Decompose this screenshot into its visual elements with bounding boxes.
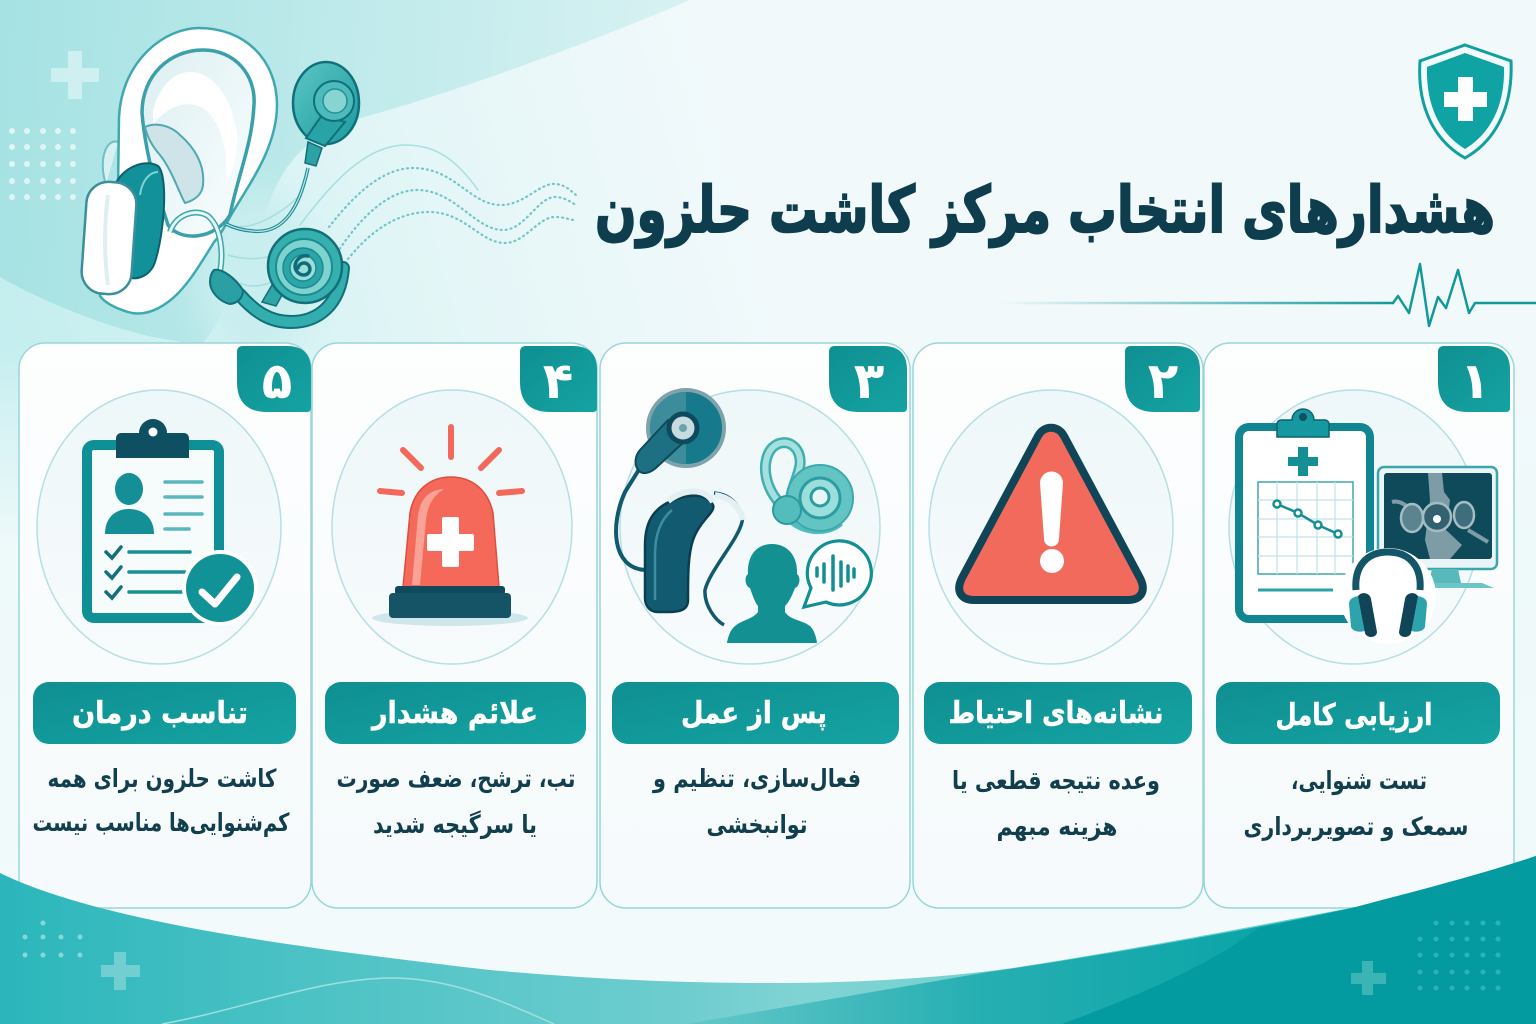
icon: behind-ear processor bbox=[645, 491, 743, 625]
decorative dots bottom left bbox=[22, 920, 82, 958]
ear inner bowl bbox=[142, 50, 254, 236]
antihelix highlight bbox=[153, 72, 237, 187]
decorative dots bottom right bbox=[1418, 920, 1500, 990]
decorative plus bottom left bbox=[101, 952, 140, 990]
icon: shield bbox=[1420, 45, 1511, 158]
ear hook bbox=[170, 213, 222, 272]
illustration: ear with cochlear implant bbox=[80, 28, 359, 322]
description: توانبخشی bbox=[706, 810, 808, 840]
sound waves bbox=[300, 145, 576, 267]
processor white bbox=[80, 180, 138, 296]
description: هزینه مبهم bbox=[996, 812, 1118, 842]
icon: clipboard with audiogram bbox=[1239, 409, 1370, 619]
faint lobe lines bbox=[228, 195, 300, 286]
badge 5 bbox=[237, 346, 311, 412]
heading pill: تناسب درمان bbox=[72, 696, 248, 731]
ear concha bbox=[145, 125, 203, 203]
description bbox=[651, 764, 861, 840]
heading pill: پس از عمل bbox=[681, 696, 827, 731]
description: وعده نتیجه قطعی یا bbox=[952, 766, 1160, 796]
icon: clipboard with check bbox=[87, 419, 258, 626]
description bbox=[336, 764, 576, 840]
badge 3 bbox=[829, 346, 907, 412]
description: تب، ترشح، ضعف صورت bbox=[336, 764, 576, 794]
heading pill bbox=[1216, 682, 1500, 744]
panel 2: caution signs bbox=[913, 343, 1203, 908]
badge 1 bbox=[1438, 346, 1510, 412]
heartbeat line bbox=[1000, 264, 1536, 326]
icon: speech bubble bbox=[804, 541, 871, 607]
lead bbox=[240, 268, 343, 322]
heading pill bbox=[325, 682, 586, 744]
badge 1: ۱ bbox=[1460, 352, 1490, 410]
description: فعال‌سازی، تنظیم و bbox=[651, 764, 861, 794]
icon: siren bbox=[372, 427, 528, 626]
badge 4: ۴ bbox=[543, 352, 573, 410]
heading pill bbox=[612, 682, 899, 744]
coil disc bbox=[293, 62, 359, 144]
heading pill bbox=[33, 682, 296, 744]
bottom wave bbox=[0, 856, 1536, 1024]
icon: CT monitor bbox=[1378, 467, 1497, 588]
badge 2 bbox=[1125, 346, 1200, 412]
panel 1: full assessment bbox=[1204, 343, 1514, 908]
icon: warning triangle bbox=[959, 428, 1143, 600]
icon: headphones bbox=[1340, 548, 1436, 644]
description bbox=[1244, 766, 1468, 842]
icon: external coil bbox=[616, 390, 724, 570]
badge 5: ۵ bbox=[262, 352, 292, 410]
decorative dots top left bbox=[9, 128, 76, 200]
description: تست شنوایی، bbox=[1291, 766, 1427, 796]
description: کاشت حلزون برای همه bbox=[48, 764, 277, 794]
decorative plus bottom right bbox=[1351, 961, 1386, 995]
badge 3: ۳ bbox=[854, 352, 884, 410]
icon: person bbox=[727, 544, 817, 643]
badge 2: ۲ bbox=[1148, 352, 1178, 410]
ear bbox=[100, 28, 277, 314]
description: یا سرگیجه شدید bbox=[373, 810, 537, 840]
processor back bbox=[115, 163, 164, 278]
icon: cochlea bbox=[765, 443, 853, 531]
heading pill: علائم هشدار bbox=[370, 696, 538, 731]
tragus outline bbox=[103, 142, 118, 185]
description: کم‌شنوایی‌ها مناسب نیست bbox=[32, 808, 290, 838]
description: سمعک و تصویربرداری bbox=[1244, 812, 1468, 842]
description bbox=[952, 766, 1160, 842]
decorative plus top left bbox=[51, 51, 99, 99]
coil cable bbox=[226, 168, 308, 231]
heading pill: ارزیابی کامل bbox=[1276, 698, 1432, 733]
description bbox=[32, 764, 290, 838]
heading pill: نشانه‌های احتیاط bbox=[948, 696, 1164, 731]
panel 5: treatment suitability bbox=[19, 343, 311, 908]
spiral cochlea bbox=[268, 229, 342, 303]
panel 3: after surgery bbox=[600, 343, 910, 908]
heading pill bbox=[924, 682, 1192, 744]
badge 4 bbox=[520, 346, 597, 412]
panel 4: warning signs bbox=[312, 343, 597, 908]
